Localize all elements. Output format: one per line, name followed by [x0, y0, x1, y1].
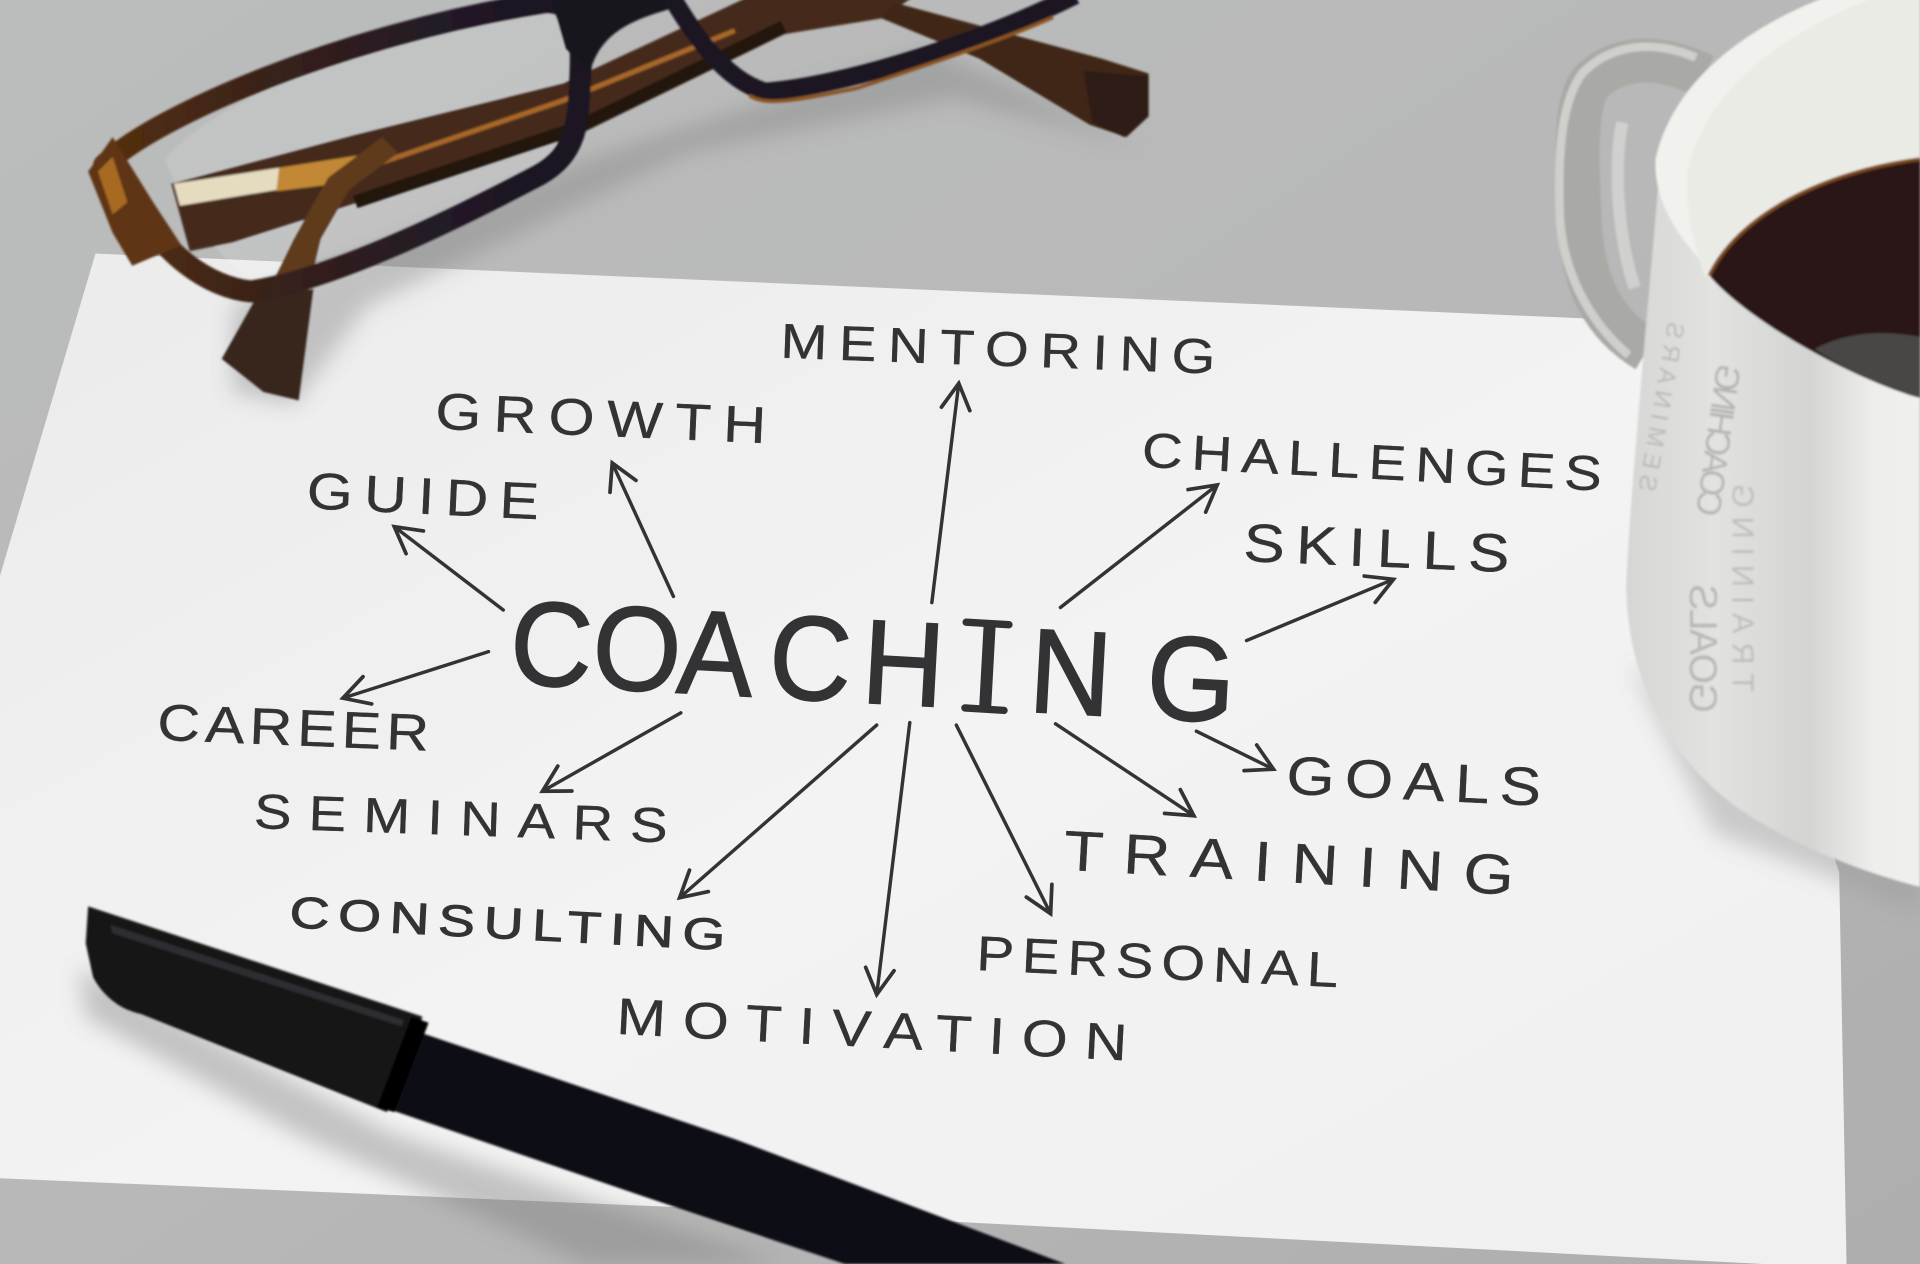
letter I bottom serif	[965, 708, 1004, 710]
back temple tip	[1084, 71, 1149, 137]
label: PERSONAL: PERSONAL	[975, 926, 1339, 998]
hinge glow	[98, 157, 127, 214]
arrow to training	[1056, 724, 1194, 816]
cap highlight	[110, 925, 404, 1026]
mirrored word: GOALS: GOALS	[1681, 584, 1724, 713]
temple highlight	[174, 168, 279, 206]
mug interior	[1687, 0, 1920, 367]
arrow to personal	[956, 725, 1051, 914]
label: MENTORING: MENTORING	[780, 314, 1216, 385]
coffee crema edge	[1709, 159, 1920, 276]
lens tint	[165, 12, 568, 277]
arrow to challenges	[1060, 485, 1217, 608]
back temple arm	[882, 2, 1149, 137]
bridge	[551, 0, 686, 71]
mirrored word: TRAINING: TRAINING	[1726, 484, 1760, 692]
label: SEMINARS: SEMINARS	[253, 784, 669, 854]
hinge	[88, 137, 181, 266]
coffee mug	[1559, 0, 1920, 912]
label: GOALS: GOALS	[1285, 745, 1543, 818]
temple tip	[222, 289, 313, 401]
label: TRAINING: TRAINING	[1062, 819, 1516, 907]
arrow to guide	[394, 527, 503, 610]
mug rim and interior	[1655, 0, 1920, 402]
arrow to career	[343, 652, 489, 698]
mug body	[1626, 159, 1920, 887]
label: GUIDE: GUIDE	[306, 462, 540, 530]
coffee	[1709, 159, 1920, 398]
cap ring	[377, 1017, 429, 1112]
temple dark core	[355, 27, 784, 202]
left lens frame	[104, 2, 581, 292]
arrow to consulting	[680, 725, 877, 898]
far temple arm	[171, 0, 912, 251]
pen shadow	[80, 968, 784, 1264]
glasses shadow	[233, 49, 1139, 404]
glasses	[88, 0, 1149, 404]
arrow to skills	[1247, 579, 1393, 641]
pen cap	[86, 906, 422, 1112]
label: SKILLS: SKILLS	[1242, 513, 1511, 584]
lens frame amber edge	[749, 17, 1053, 101]
label: CONSULTING: CONSULTING	[288, 887, 727, 960]
arrow to seminars	[542, 713, 681, 791]
handle inner reflection	[1618, 122, 1635, 288]
mirrored word: SEMINARS: SEMINARS	[1632, 320, 1689, 494]
label: CHALLENGES: CHALLENGES	[1141, 423, 1603, 502]
label: GROWTH: GROWTH	[434, 382, 767, 454]
arrow to goals	[1196, 731, 1273, 769]
label: CAREER: CAREER	[156, 693, 430, 762]
heading word: COACHING	[507, 575, 1239, 748]
arrow to growth	[612, 463, 673, 596]
label: MOTIVATION: MOTIVATION	[615, 987, 1129, 1072]
arrow to motivation	[877, 723, 910, 995]
right lens frame	[667, 0, 1075, 92]
sheet of paper	[0, 254, 1847, 1264]
mug shadow	[1629, 661, 1920, 912]
pen barrel	[387, 1031, 1065, 1264]
temple orange streak	[355, 31, 735, 171]
mug handle	[1578, 61, 1704, 350]
handle outer edge highlight	[1559, 47, 1696, 355]
arrow to mentoring	[932, 383, 959, 603]
mirrored word: COACHING: COACHING	[1688, 362, 1747, 519]
letter I top serif	[966, 622, 1009, 625]
temple amber highlight	[277, 156, 358, 191]
coffee reflection	[1815, 333, 1920, 398]
near temple arm	[267, 137, 398, 300]
pen	[80, 906, 1065, 1264]
mind map arrows	[343, 383, 1393, 995]
